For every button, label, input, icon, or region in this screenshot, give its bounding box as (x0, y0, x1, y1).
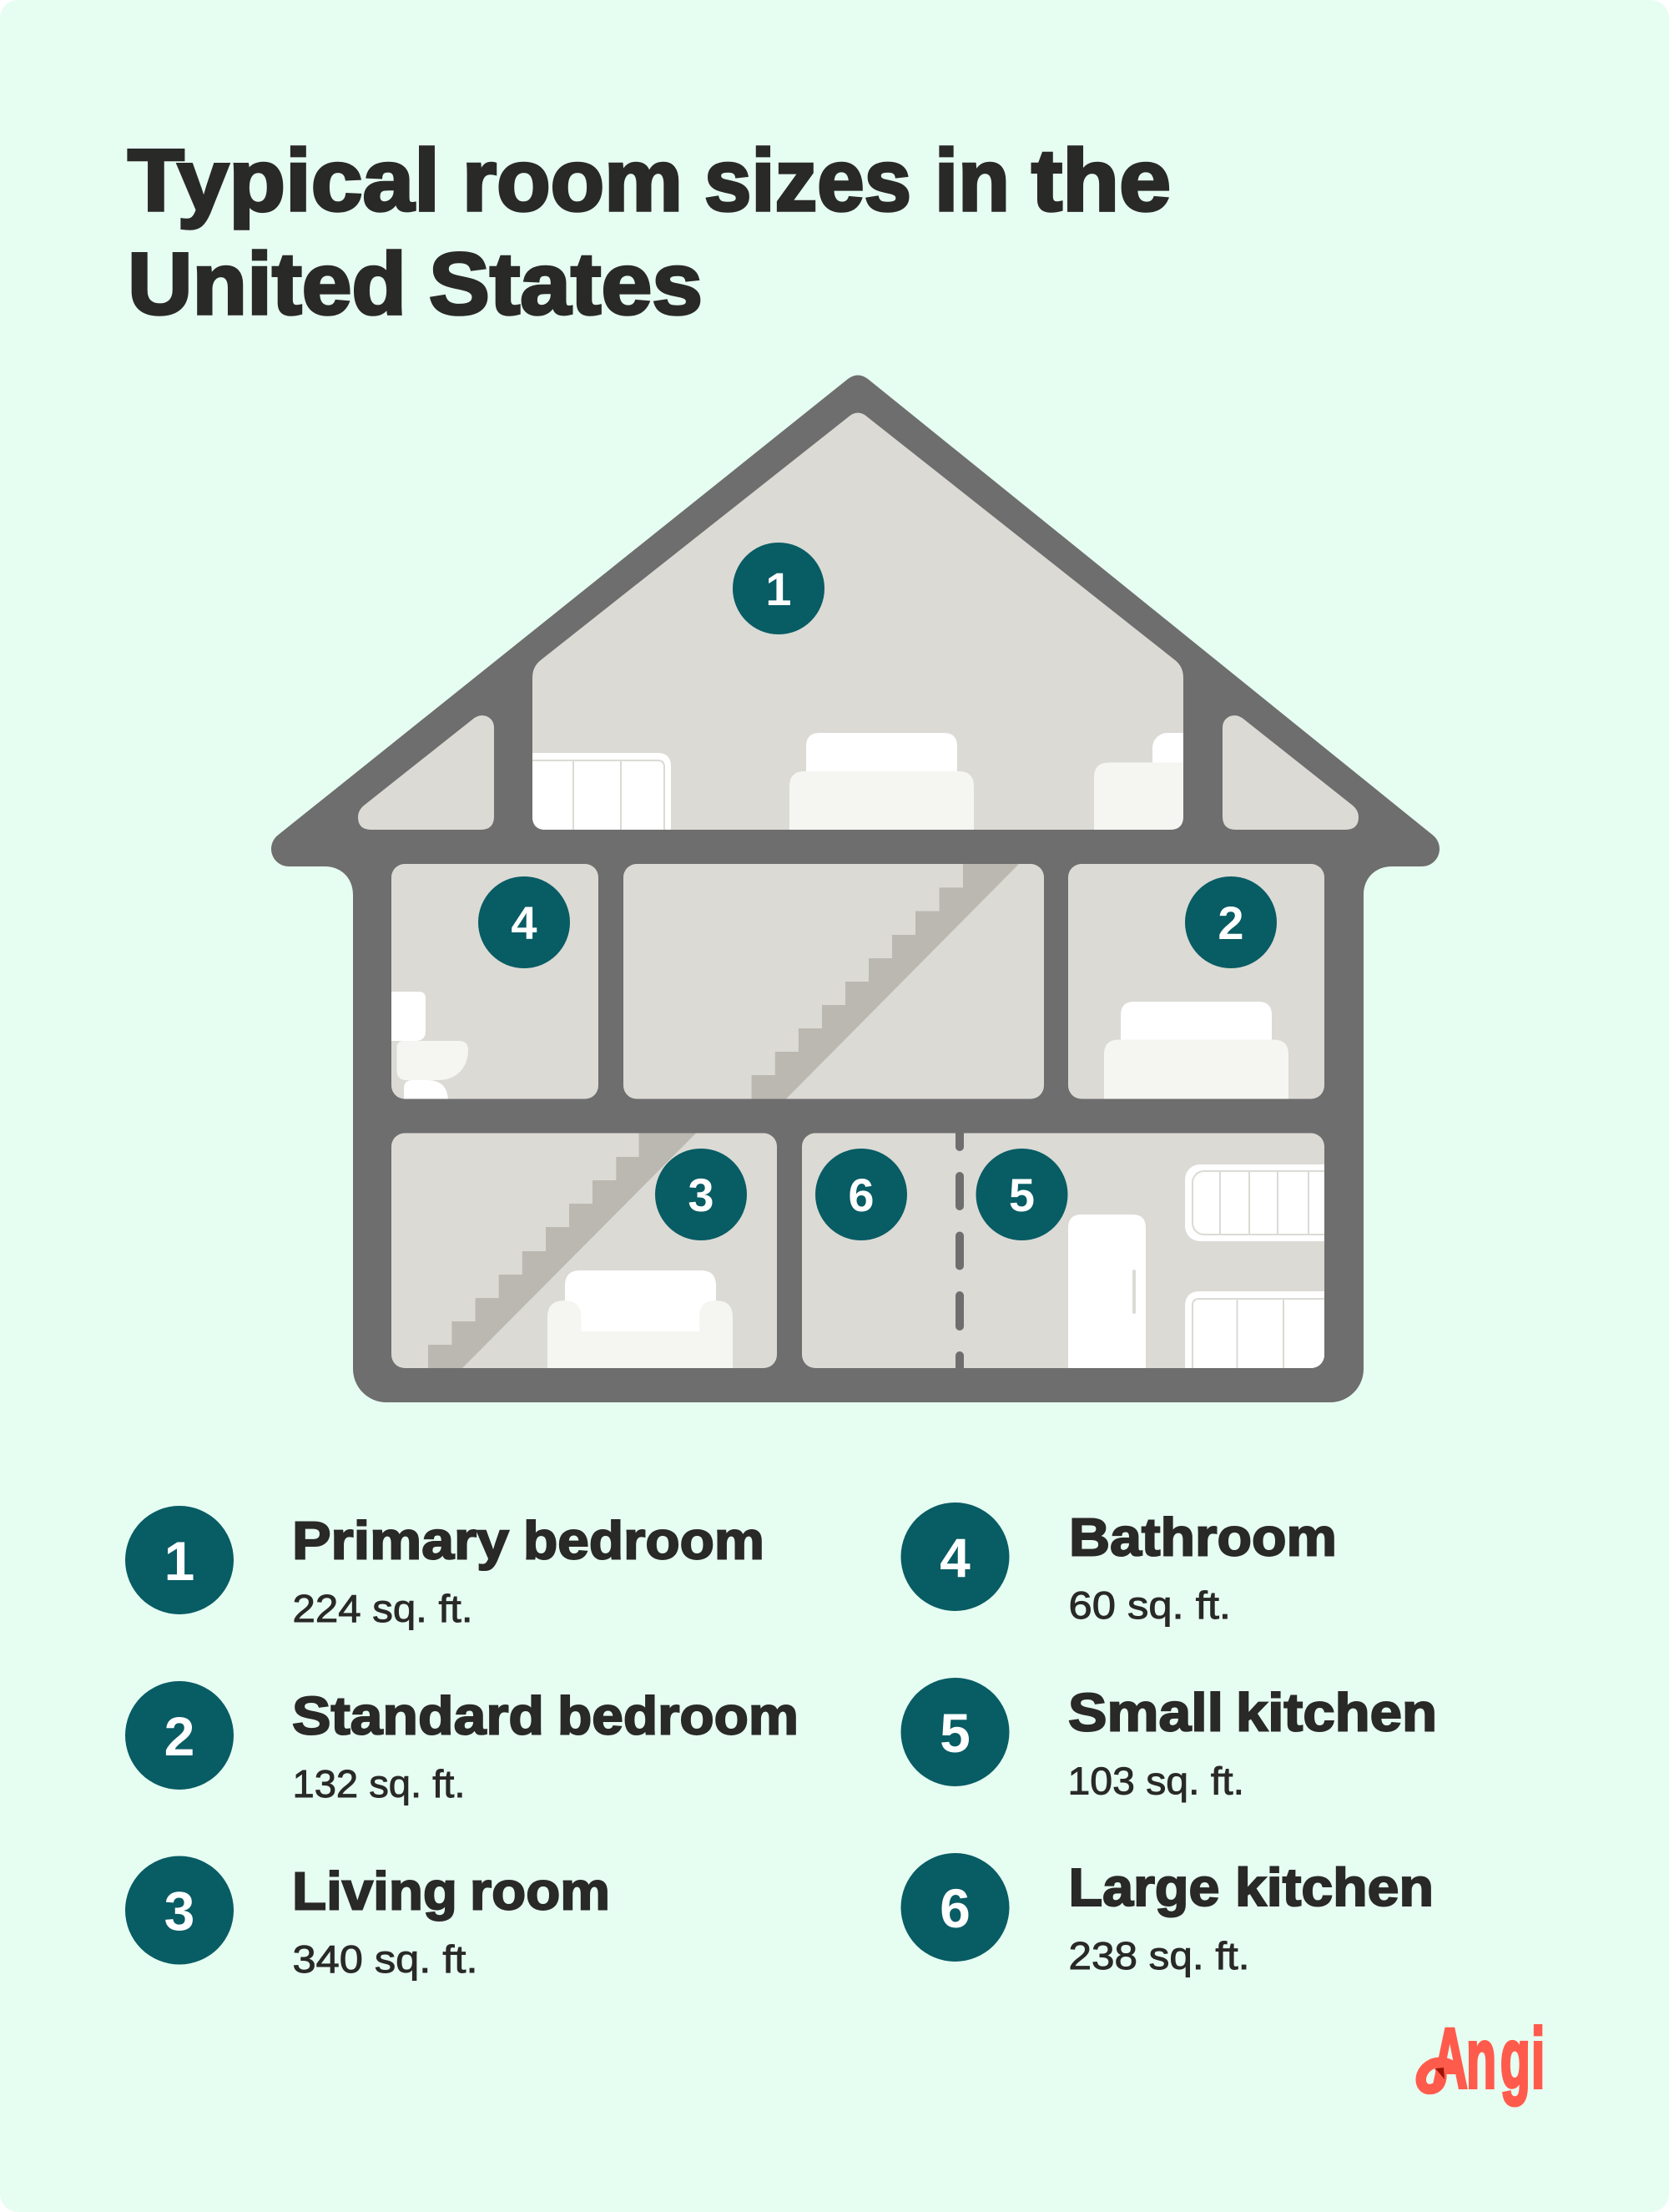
title: Typical (128, 132, 440, 230)
panel: right attic (1223, 715, 1359, 830)
legend: primary bedroom: 224 sq. ft. (292, 1587, 472, 1630)
house marker 4 (478, 876, 570, 968)
legend: large kitchen: 6 (940, 1877, 971, 1939)
legend: living room: room (470, 1861, 610, 1922)
legend: small kitchen: 103 sq. ft. (1068, 1760, 1244, 1803)
panel: living room (391, 1134, 777, 1368)
house marker 3 (655, 1149, 747, 1240)
house marker 1: 1 (765, 563, 792, 615)
legend: small kitchen: kitchen (1236, 1683, 1437, 1743)
title: States (429, 235, 703, 333)
legend: small kitchen: 5 (940, 1702, 971, 1764)
armchair (1094, 733, 1183, 830)
title: the (1031, 132, 1171, 230)
stove top (1185, 1164, 1324, 1241)
house marker 5: 5 (1009, 1169, 1035, 1221)
legend: large kitchen: Large (1068, 1857, 1220, 1917)
legend: living room: Living (292, 1861, 457, 1922)
panel: primary bedroom (501, 412, 1203, 831)
kitchen divider dashed line (956, 1127, 964, 1373)
stairs (428, 1134, 696, 1368)
panel: standard bedroom (1068, 864, 1324, 1102)
title: in (935, 132, 1010, 230)
legend: small kitchen (901, 1678, 1437, 1803)
legend: primary bedroom (125, 1506, 764, 1630)
legend: large kitchen: kitchen (1235, 1857, 1434, 1917)
legend: large kitchen: 238 sq. ft. (1068, 1934, 1250, 1977)
legend: standard bedroom: Standard (292, 1686, 544, 1746)
legend: primary bedroom: 1 (164, 1530, 194, 1592)
toilet (391, 992, 468, 1102)
legend: primary bedroom: Primary (292, 1511, 509, 1571)
legend: primary bedroom: bedroom (523, 1511, 764, 1571)
legend: standard bedroom: bedroom (557, 1686, 799, 1746)
sofa (547, 1270, 733, 1368)
bed (1104, 1002, 1288, 1102)
dresser (532, 753, 671, 830)
house marker 2: 2 (1218, 896, 1244, 949)
legend: bathroom: 60 sq. ft. (1068, 1583, 1231, 1627)
house marker 4: 4 (511, 896, 537, 949)
house outline (271, 376, 1440, 1402)
legend: large kitchen (901, 1853, 1434, 1977)
panel: left attic (358, 715, 494, 830)
legend: small kitchen: Small (1068, 1683, 1223, 1743)
counter (1185, 1291, 1324, 1368)
house cross-section illustration (271, 376, 1440, 1402)
legend: bathroom: Bathroom (1069, 1507, 1337, 1568)
legend: standard bedroom: 2 (164, 1705, 194, 1767)
title: sizes (704, 132, 911, 230)
legend: bathroom (901, 1502, 1337, 1627)
bed (789, 733, 974, 830)
house marker 6 (815, 1149, 907, 1240)
panel: stairwell (623, 864, 1044, 1098)
panel: bathroom (391, 864, 598, 1102)
fridge (1068, 1215, 1146, 1373)
house marker 6: 6 (848, 1169, 875, 1221)
house marker 5 (976, 1149, 1068, 1240)
house marker 1 (733, 543, 824, 634)
title: room (462, 132, 683, 230)
house marker 2 (1185, 876, 1277, 968)
panel: kitchen (802, 1134, 1324, 1368)
legend: living room: 340 sq. ft. (292, 1937, 477, 1981)
legend: bathroom: 4 (940, 1527, 971, 1588)
legend: standard bedroom: 132 sq. ft. (292, 1762, 466, 1805)
stairs (752, 864, 1019, 1098)
legend: standard bedroom (125, 1681, 799, 1805)
Angi logo: Angi (1432, 2011, 1545, 2106)
title: United (128, 235, 406, 333)
title (128, 132, 1171, 333)
legend: living room: 3 (164, 1880, 194, 1942)
house marker 3: 3 (688, 1169, 714, 1221)
legend: living room (125, 1856, 610, 1981)
